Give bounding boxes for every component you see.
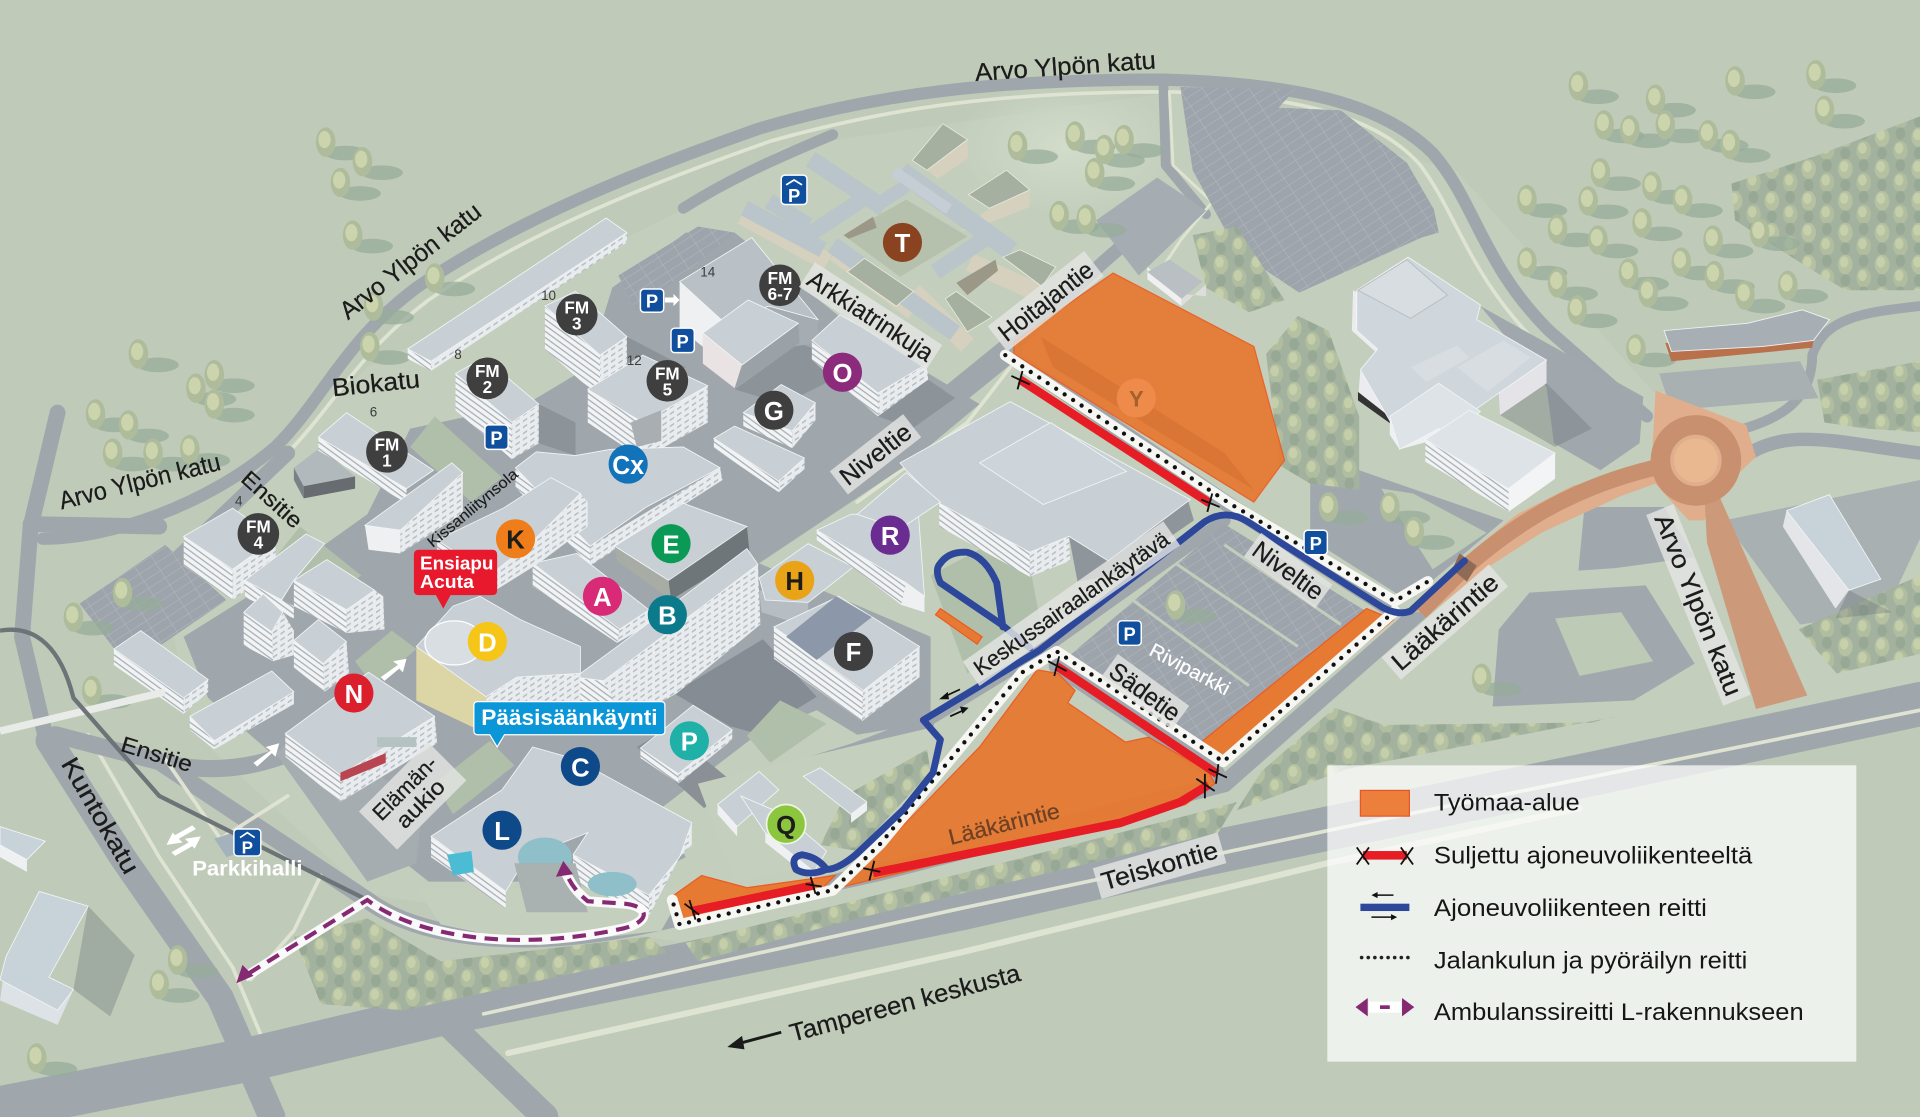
path south of Teiskontie (508, 808, 1580, 1053)
T: lower spine (833, 245, 955, 333)
sign: P FM2 (485, 425, 508, 449)
dark parking F (673, 639, 817, 733)
label: Teiskontie: Teiskontie (1098, 836, 1221, 896)
label: Ensitie north: Ensitie (236, 466, 308, 533)
building: H (759, 544, 853, 627)
sign: P Riviparkki (1118, 621, 1141, 645)
forest: central (1266, 316, 1359, 490)
legend: vehicle route: Ajoneuvoliikenteen reitti (1434, 895, 1707, 922)
building numbers: 14 (700, 265, 716, 280)
building numbers: 4 (235, 494, 243, 509)
road: west vertical (22, 413, 58, 741)
badge FM 2: 2 (483, 377, 492, 397)
callout: Ensiapu Acuta: Ensiapu (420, 552, 493, 573)
T: wedge east wall (960, 190, 1030, 231)
badge O: O (832, 360, 852, 388)
road: Arvo Ylpön katu west spur (31, 524, 159, 527)
badge G: G (764, 398, 784, 426)
label: Lääkärintie in zone: Lääkärintie (946, 798, 1062, 850)
label: Elämänaukio: aukio (391, 774, 450, 833)
badge C: C (571, 754, 590, 782)
building: Q complex (718, 768, 867, 882)
building: FM1 south (365, 463, 463, 553)
parking: NE lodge (1659, 361, 1818, 410)
T: courtyard (844, 200, 967, 277)
badge T (883, 223, 922, 262)
roundabout island (1674, 438, 1718, 482)
label: Elämänaukio (359, 742, 466, 850)
sign: P west with arrow (640, 289, 680, 312)
sign: P below: P (677, 331, 689, 352)
T: west cross wing (808, 200, 862, 235)
path: Teiskontie median (484, 710, 1920, 1014)
green in lower east parking (1555, 612, 1653, 676)
parking strips Riviparkki (1133, 545, 1341, 686)
road: Sädetie (1057, 666, 1217, 774)
T: wedge north wall (927, 140, 969, 179)
road area by east block (1724, 480, 1920, 624)
road: Niveltie north (796, 349, 1010, 524)
badge H (775, 561, 814, 600)
legend: pedestrian route: Jalankulun ja pyöräilyn reitti (1434, 948, 1747, 975)
badge R (871, 516, 910, 555)
building: utility (1147, 260, 1206, 306)
badge FM 6-7 (759, 264, 801, 306)
callout: Pääsisäänkäynti (474, 702, 665, 747)
elevated rail (0, 630, 367, 900)
badge T: T (895, 230, 911, 258)
badge O (823, 353, 862, 392)
zone: Y area (1014, 273, 1284, 502)
building: FM6-7 tower (680, 238, 857, 404)
forest: east (1817, 361, 1920, 432)
building: FM5 (588, 355, 708, 459)
building: east lower white block (1425, 410, 1555, 512)
label: Arvo Ylpön katu north: Arvo Ylpön katu (974, 46, 1157, 87)
building: FM2 (456, 358, 576, 459)
badge R: R (881, 523, 900, 551)
building: parkkihalli kiosk (214, 833, 245, 857)
badge E (651, 524, 691, 563)
road labels (55, 46, 1751, 1049)
zone: small strip (936, 609, 982, 644)
parking and service areas (80, 87, 1920, 945)
white traffic arrows (167, 659, 407, 856)
badge H: H (785, 568, 804, 596)
sign: P garage north (781, 175, 807, 206)
label: Riviparkki: Riviparkki (1145, 639, 1234, 700)
label: Ensitie south: Ensitie (118, 731, 196, 777)
building: R (817, 513, 924, 612)
badge K: K (506, 527, 525, 555)
label: Keskussairaalankäytävä: Keskussairaalankäytävä (969, 526, 1174, 681)
green lower campus (698, 729, 943, 882)
hill (955, 80, 1176, 214)
label: Hoitajantie: Hoitajantie (993, 256, 1099, 347)
label: Arkkiatrinkuja: Arkkiatrinkuja (802, 265, 939, 368)
T: sage east (1003, 250, 1056, 287)
building: south east lower (1783, 495, 1892, 618)
path beside Niveltie (857, 367, 1010, 502)
building: low west (114, 631, 208, 714)
badge Cx (609, 444, 648, 484)
building: G south wing (714, 426, 804, 492)
zone: south west (672, 876, 835, 920)
building: F (774, 596, 920, 721)
building: T complex (742, 124, 1056, 345)
building numbers: 6 (370, 404, 377, 419)
legend: closed road: Suljettu ajoneuvoliikenteeltä (1434, 842, 1753, 869)
parking: north large (1180, 87, 1439, 293)
label: Sädetie: Sädetie (1104, 657, 1185, 727)
building numbers: 10 (541, 288, 556, 303)
label: Kissanliitynsola: Kissanliitynsola (424, 465, 522, 551)
road: Kuntokatu (49, 741, 272, 1117)
callout: Ensiapu Acuta (414, 550, 497, 609)
legend: work site (1360, 790, 1580, 817)
parking: Riviparkki (1063, 524, 1384, 749)
road: Hoitajantie (1010, 220, 1151, 349)
building: long north block (408, 218, 627, 371)
T: bar walls (742, 216, 1041, 345)
badge FM 4 (238, 513, 279, 555)
legend panel (1327, 765, 1856, 1062)
parking signs (234, 175, 1327, 857)
label: Arvo Ylpön katu east: Arvo Ylpön katu (1649, 510, 1747, 700)
badge C (561, 747, 600, 786)
T: raised north bar (894, 171, 949, 209)
building: FM3 (545, 291, 686, 398)
building badges (238, 223, 1156, 850)
skybridge (0, 692, 165, 731)
T: sage SE (945, 291, 992, 332)
zone: Lääkärintie triangle (844, 670, 1215, 887)
overlay: road west (1420, 465, 1665, 612)
badge FM 3: 3 (572, 313, 582, 333)
building: K wing (437, 478, 588, 594)
badge P (670, 721, 709, 760)
construction zones (672, 273, 1393, 920)
badge Cx: Cx (612, 452, 645, 480)
building: D complex (416, 596, 580, 733)
path along north arc (282, 92, 1635, 459)
arrow: to D (381, 659, 407, 681)
building numbers: 12 (627, 353, 642, 368)
badge F: F (846, 639, 861, 667)
badge FM 3: FM (564, 297, 589, 317)
label: Arvo Ylpön katu west: Arvo Ylpön katu (56, 448, 223, 515)
plaza near hub (276, 722, 422, 882)
badge Q: Q (776, 812, 796, 840)
badge FM 6-7: 6-7 (768, 284, 792, 304)
building: P (640, 705, 732, 784)
badge Q (767, 804, 806, 844)
vehicle route (794, 515, 1464, 873)
building numbers (235, 265, 716, 509)
forest: NE (1731, 116, 1920, 290)
overlay: west arm and circle (1416, 391, 1756, 612)
parking by north block (618, 227, 735, 312)
label: Kuntokatu: Kuntokatu (55, 753, 144, 879)
badge K (496, 519, 535, 558)
building: east upper L wing (1390, 383, 1480, 449)
building: G north wing (743, 384, 816, 448)
parking: lower east lower (1493, 585, 1695, 707)
zone shading (1041, 337, 1254, 490)
sign: P below (671, 328, 694, 353)
building: south west block (0, 891, 135, 1025)
T: north cross wing (872, 186, 906, 208)
building: large east hospital block (857, 402, 1194, 582)
building: east lodge (1664, 310, 1829, 361)
legend: work site: Työmaa-alue (1434, 790, 1580, 817)
arrow: parkkihalli out (167, 825, 196, 845)
sign: P Niveltie (1304, 530, 1327, 555)
badge G (754, 391, 793, 430)
forest: SE (1799, 576, 1920, 673)
building numbers: 8 (454, 347, 462, 362)
overlay: dark patch (1452, 553, 1477, 582)
road: Ensitie north (159, 453, 288, 576)
T: north west spine (811, 159, 884, 208)
road: Niveltie east (1010, 355, 1390, 609)
road: Ensitie (55, 647, 422, 769)
label: Elämänaukio: Elämän- (367, 751, 442, 825)
route direction arrows (939, 689, 969, 716)
roundabout works overlay (1416, 391, 1807, 709)
badge FM 1: 1 (382, 451, 392, 471)
road: Arvo Ylpön katu north arc (43, 80, 1647, 539)
badge FM 1: FM (375, 435, 399, 455)
closed roads (692, 380, 1217, 911)
parking: east of Niveltie (1310, 470, 1504, 600)
badge D: D (478, 629, 497, 657)
building: A wings (533, 553, 649, 643)
label: Lääkärintie east: Lääkärintie (1386, 569, 1504, 676)
building: Cx (516, 447, 722, 566)
building: block north of towers (245, 534, 324, 618)
parking: small north (1096, 178, 1206, 276)
road: NE of roundabout (1720, 306, 1920, 435)
parking: by east building (1480, 306, 1643, 470)
badge A (583, 577, 622, 616)
building: B tower (576, 549, 760, 722)
sign: P west with arrow: P (646, 290, 658, 311)
building: tower block (244, 594, 294, 661)
campus central ground (184, 233, 980, 882)
road: east of roundabout (1727, 439, 1920, 471)
building: E (615, 503, 749, 600)
road: Teiskontie (0, 704, 1920, 1108)
green patches (276, 416, 1041, 814)
label: Niveltie north: Niveltie (834, 418, 917, 491)
building: large east tower complex (1352, 257, 1592, 447)
arrow: to Tampere centre (727, 1032, 781, 1049)
T: wedge east roof (969, 170, 1030, 208)
badge FM 4: FM (246, 517, 271, 537)
forest: south east strip (1237, 708, 1616, 811)
path by Kuntokatu (88, 735, 263, 1041)
T: north spine (901, 171, 1011, 251)
badge FM 5: 5 (663, 380, 673, 400)
badge L (482, 811, 522, 850)
parking: lower east upper (1578, 507, 1695, 571)
badge Y (1117, 378, 1156, 418)
badge FM 5: FM (655, 364, 680, 384)
south plaza (416, 888, 686, 945)
building: FM1 (318, 413, 433, 503)
sign: P Parkkihalli (234, 829, 261, 857)
forest: lower campus (820, 749, 931, 851)
building: FM4 (184, 508, 276, 600)
legend (1327, 765, 1856, 1062)
road: lower campus link (747, 722, 927, 784)
closure crosses (684, 371, 1227, 920)
building: low south west (190, 671, 294, 749)
sign: P FM2: P (490, 427, 503, 448)
badge F (834, 632, 873, 671)
T: east cross wing (936, 234, 992, 272)
path west meadow (165, 759, 321, 980)
label: Parkkihalli: Parkkihalli (192, 858, 302, 881)
road: ambulance service road (159, 557, 1482, 939)
badge L: L (494, 818, 510, 846)
buildings (0, 124, 1892, 1025)
T: wedge north roof (912, 124, 967, 170)
label: Tampereen keskusta: Tampereen keskusta (787, 959, 1023, 1048)
building: west edge small (0, 827, 45, 872)
sign: P Niveltie: P (1310, 533, 1322, 554)
overlay: ring road (1660, 425, 1731, 496)
badge B: B (658, 602, 677, 630)
road: vertical to parking (1163, 80, 1206, 214)
badge D (468, 622, 507, 661)
path: to Hoitajantie (1157, 92, 1212, 276)
badge N (334, 673, 373, 713)
forest: south west (294, 918, 667, 1010)
T: court walls (844, 217, 877, 239)
T: west roof (744, 201, 823, 250)
label: Niveltie east: Niveltie (1247, 536, 1329, 606)
pedestrian and bicycle route (672, 355, 1428, 924)
badge Y: Y (1129, 387, 1144, 412)
badge FM 2: FM (475, 361, 500, 381)
badge FM 5 (647, 360, 688, 402)
badge A: A (593, 584, 612, 612)
campus lighter ground (159, 92, 1920, 943)
sign: P Riviparkki: P (1123, 623, 1136, 644)
arrow: parkkihalli in (171, 836, 201, 856)
badge B (648, 595, 687, 634)
arrow: to N (253, 743, 279, 767)
badge E: E (662, 531, 680, 559)
road: T building service (683, 135, 833, 208)
building: C and L complex (431, 747, 692, 916)
building: tower block south (294, 620, 349, 692)
green wedge (1381, 489, 1487, 569)
forest: central north (1193, 227, 1284, 312)
building: O (812, 315, 955, 429)
dark service road (637, 729, 735, 808)
badge FM 2 (467, 358, 508, 399)
sign: P garage north: P (788, 185, 800, 206)
ambulance route (236, 861, 644, 983)
building: FM1 west annex (294, 448, 355, 498)
parking: west (80, 545, 227, 667)
building: N (285, 672, 437, 802)
overlay: south arm (1704, 496, 1807, 709)
label: Arvo Ylpön katu north west: Arvo Ylpön katu (334, 197, 487, 325)
road: Keskussairaalankäytävä (924, 520, 1224, 722)
zone: strip east (1201, 609, 1393, 759)
badge P: P (681, 729, 698, 757)
legend: ambulance route: Ambulanssireitti L-rakennukseen (1434, 999, 1804, 1026)
badge FM 4: 4 (254, 533, 264, 553)
callout: Pääsisäänkäynti: Pääsisäänkäynti (481, 705, 658, 730)
legend: vehicle route (1360, 892, 1707, 922)
sign: P Parkkihalli: P (242, 837, 253, 857)
badge FM 1 (366, 431, 408, 473)
label: Biokatu: Biokatu (331, 365, 421, 402)
callout: Ensiapu Acuta: Acuta (420, 571, 475, 592)
road: cross street south (441, 1016, 545, 1117)
forest: south of Lääkärintie (686, 802, 1237, 961)
badge N: N (345, 681, 363, 709)
badge FM 6-7: FM (768, 268, 792, 288)
scattered trees (129, 339, 179, 372)
building: block east of FM4 (294, 560, 384, 633)
T: sage south (847, 258, 913, 306)
badge FM 3 (556, 294, 598, 336)
